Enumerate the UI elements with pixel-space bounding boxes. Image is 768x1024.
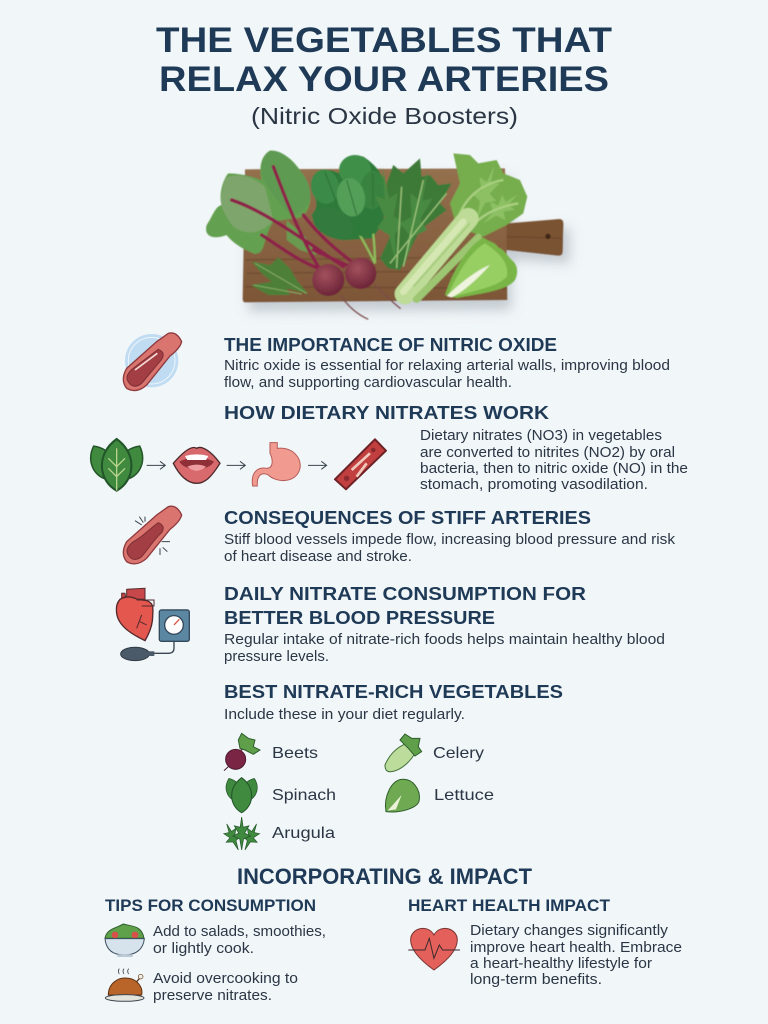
beet leaves [206, 151, 310, 254]
panel: tips for consumption [105, 897, 326, 1004]
impact text: Dietary changes significantly [470, 923, 669, 939]
description [420, 428, 688, 493]
icon: blood vessel [335, 439, 386, 489]
vegetable list [219, 733, 494, 853]
cutting board [243, 168, 563, 302]
description: Stiff blood vessels impede flow, increasing blood pressure and risk [224, 532, 676, 548]
heading: HEART HEALTH IMPACT [408, 897, 610, 915]
section: daily nitrate consumption [116, 583, 665, 665]
process diagram [84, 439, 386, 491]
description [224, 532, 676, 565]
section: consequences of stiff arteries [123, 506, 676, 565]
item: celery: Celery [433, 745, 484, 762]
icon: spinach [84, 439, 149, 491]
section: how dietary nitrates work [84, 402, 688, 493]
title: RELAX YOUR ARTERIES [159, 60, 609, 99]
icon: relaxed artery [123, 333, 182, 391]
description [224, 358, 670, 391]
title: THE VEGETABLES THAT [156, 21, 612, 60]
heading: CONSEQUENCES OF STIFF ARTERIES [224, 507, 591, 528]
description: Include these in your diet regularly. [224, 707, 465, 723]
description: Nitric oxide is essential for relaxing arterial walls, improving blood [224, 358, 670, 374]
icon: mouth [173, 447, 220, 483]
impact text: a heart-healthy lifestyle for [470, 956, 652, 972]
section: the importance of nitric oxide [123, 333, 670, 391]
icon: stiff artery [123, 506, 182, 564]
arrow [308, 461, 327, 469]
spinach [308, 155, 390, 263]
tip text: preserve nitrates. [153, 988, 272, 1004]
item: lettuce [385, 779, 494, 812]
title [156, 21, 612, 99]
description: Regular intake of nitrate-rich foods helps maintain healthy blood [224, 632, 665, 648]
impact text: long-term benefits. [470, 972, 602, 988]
description: pressure levels. [224, 649, 329, 665]
impact text [470, 923, 682, 988]
tip text [153, 971, 298, 1004]
item: celery [385, 734, 484, 772]
arugula [380, 158, 452, 270]
small arugula on board [251, 257, 308, 295]
item: spinach [222, 776, 336, 813]
heading: BETTER BLOOD PRESSURE [224, 607, 495, 628]
item: lettuce: Lettuce [434, 787, 494, 804]
heading: THE IMPORTANCE OF NITRIC OXIDE [224, 334, 557, 355]
item: spinach: Spinach [272, 787, 336, 804]
item: beets [224, 733, 318, 771]
beets [312, 264, 344, 296]
heading: TIPS FOR CONSUMPTION [105, 897, 316, 915]
icon: salad bowl [105, 924, 144, 957]
beet stems [232, 167, 352, 268]
subtitle: (Nitric Oxide Boosters) [251, 103, 518, 129]
description: of heart disease and stroke. [224, 549, 412, 565]
celery stalks [405, 218, 468, 294]
heading: DAILY NITRATE CONSUMPTION FOR [224, 583, 586, 604]
arrow [147, 461, 165, 469]
lettuce [445, 237, 517, 298]
heading [224, 583, 586, 628]
icon: roast chicken [105, 969, 144, 1001]
icon: heart with pulse [408, 928, 460, 970]
description [224, 632, 665, 665]
impact text: improve heart health. Embrace [470, 940, 682, 956]
item: arugula: Arugula [272, 825, 335, 842]
description: stomach, promoting vasodilation. [420, 477, 648, 493]
description: Dietary nitrates (NO3) in vegetables [420, 428, 662, 444]
arrow [227, 461, 245, 469]
section: best nitrate-rich vegetables [219, 681, 563, 853]
tip text: Add to salads, smoothies, [153, 924, 326, 940]
panel: heart health impact [408, 897, 682, 988]
board shadow [248, 177, 570, 312]
tip text [153, 924, 326, 957]
heading: HOW DIETARY NITRATES WORK [224, 402, 550, 423]
icon: stomach [252, 443, 300, 486]
description: flow, and supporting cardiovascular health. [224, 375, 512, 391]
heading: BEST NITRATE-RICH VEGETABLES [224, 681, 563, 702]
celery leaves [450, 153, 527, 237]
icon: heart and blood pressure cuff [116, 588, 189, 661]
item: beets: Beets [272, 745, 318, 762]
hero image: vegetables on cutting board [206, 151, 570, 319]
heading: incorporating and impact: INCORPORATING & IMPACT [237, 864, 533, 889]
tip text: or lightly cook. [153, 941, 254, 957]
description: are converted to nitrites (NO2) by oral [420, 445, 675, 461]
tip text: Avoid overcooking to [153, 971, 298, 987]
description: bacteria, then to nitric oxide (NO) in the [420, 461, 688, 477]
item: arugula [219, 817, 335, 853]
